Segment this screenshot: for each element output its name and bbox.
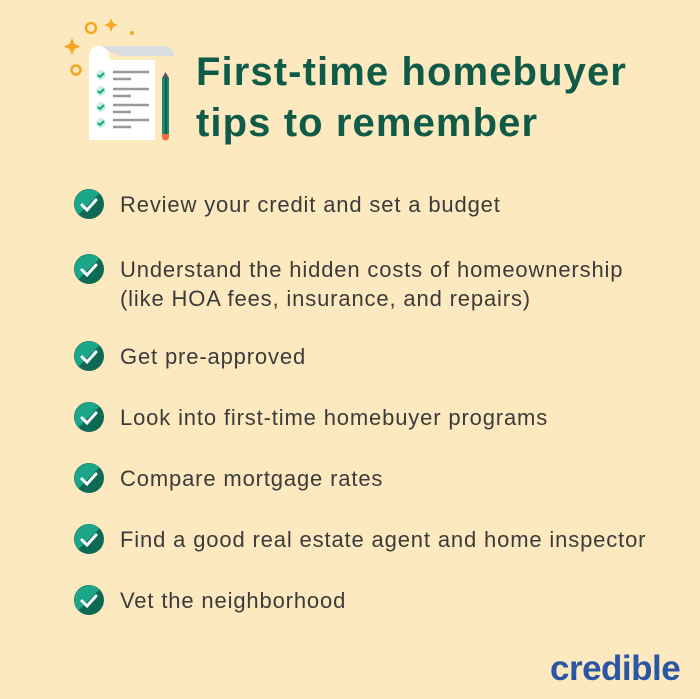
logo: credible	[550, 649, 680, 688]
item 7	[74, 585, 346, 615]
item 4: Look into first-time homebuyer programs	[120, 405, 548, 430]
item 6: Find a good real estate agent and home inspector	[120, 527, 646, 552]
title	[196, 50, 627, 145]
item 1: Review your credit and set a budget	[120, 192, 501, 217]
item 7: Vet the neighborhood	[120, 588, 346, 613]
item 2: Understand the hidden costs of homeownership	[120, 257, 623, 282]
title: tips to remember	[196, 101, 538, 145]
item 2: (like HOA fees, insurance, and repairs)	[120, 286, 531, 311]
item 3	[74, 341, 306, 371]
item 2	[74, 254, 623, 311]
item 3: Get pre-approved	[120, 344, 306, 369]
title: First-time homebuyer	[196, 50, 627, 94]
icon: checklist	[64, 18, 174, 140]
item 5: Compare mortgage rates	[120, 466, 383, 491]
